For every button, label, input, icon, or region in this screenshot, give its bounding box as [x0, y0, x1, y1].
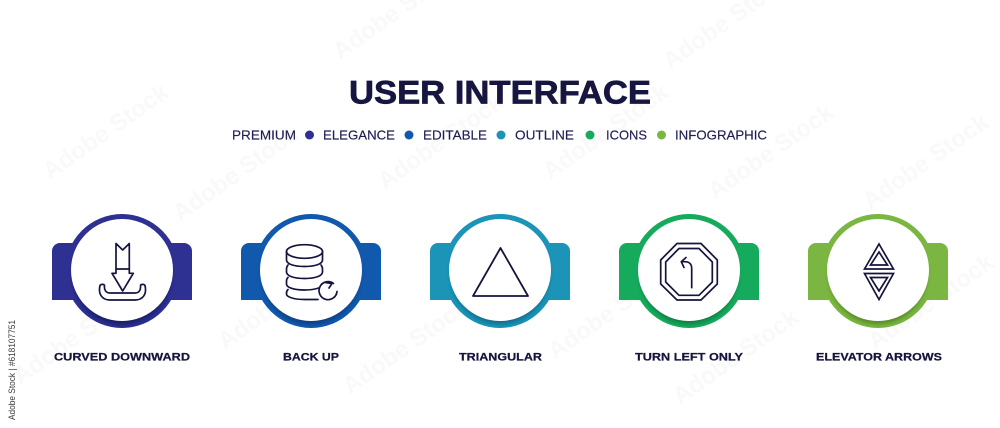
- white disc: [827, 219, 929, 321]
- ring: [821, 214, 935, 328]
- stock id caption: Adobe Stock | #618107751: [7, 320, 18, 420]
- tab: [619, 243, 759, 300]
- watermark: Adobe Stock: [338, 293, 474, 400]
- label: TRIANGULAR: [459, 351, 542, 363]
- watermark: Adobe Stock: [858, 108, 994, 215]
- watermark: Adobe Stock: [168, 120, 304, 227]
- legend word: infographic: INFOGRAPHIC: [675, 128, 767, 142]
- tab: [808, 243, 948, 300]
- watermark: Adobe Stock: [863, 248, 999, 355]
- legend word: outline: OUTLINE: [515, 128, 574, 142]
- panel: curved downward: [52, 214, 192, 363]
- subtitle legend: [232, 128, 767, 142]
- watermark: Adobe Stock: [538, 78, 674, 185]
- ring: [443, 214, 557, 328]
- white disc: [260, 219, 362, 321]
- tab: [241, 243, 381, 300]
- panel: elevator arrows: [808, 214, 948, 363]
- legend dot: infographic: [657, 130, 666, 140]
- watermark: Adobe Stock: [543, 258, 679, 365]
- icon: database with refresh: [286, 245, 337, 300]
- watermark: Adobe Stock: [38, 78, 174, 185]
- white disc: [71, 219, 173, 321]
- legend word: icons: ICONS: [606, 128, 647, 142]
- watermark: Adobe Stock: [373, 88, 509, 195]
- label: CURVED DOWNWARD: [54, 351, 190, 363]
- legend dot: editable: [404, 130, 414, 140]
- panel: turn left only: [619, 214, 759, 363]
- ring: [254, 214, 368, 328]
- icon: downward arrow over tray: [99, 244, 146, 300]
- tab: [52, 243, 192, 300]
- white disc: [638, 219, 740, 321]
- label: ELEVATOR ARROWS: [816, 351, 943, 363]
- tab: [430, 243, 570, 300]
- label: TURN LEFT ONLY: [635, 351, 744, 363]
- label: BACK UP: [283, 351, 340, 363]
- legend dot: icons: [586, 130, 594, 140]
- icon: octagon sign with left turn arrow: [661, 244, 717, 300]
- icon: up and down triangles: [864, 244, 894, 300]
- watermark: Adobe Stock: [668, 303, 804, 410]
- ring: [65, 214, 179, 328]
- legend dot: elegance: [305, 130, 314, 140]
- ring: [632, 214, 746, 328]
- panel: triangular: [430, 214, 570, 363]
- icon: triangle: [473, 248, 528, 296]
- watermark: Adobe Stock: [8, 283, 144, 390]
- watermark: Adobe Stock: [703, 98, 839, 205]
- watermark: Adobe Stock: [213, 248, 349, 355]
- white disc: [449, 219, 551, 321]
- legend dot: outline: [496, 130, 506, 140]
- legend word: premium: PREMIUM: [232, 128, 296, 142]
- title: USER INTERFACE: [349, 74, 651, 110]
- legend word: elegance: ELEGANCE: [323, 128, 395, 142]
- panel: back up: [241, 214, 381, 363]
- legend word: editable: EDITABLE: [423, 128, 487, 142]
